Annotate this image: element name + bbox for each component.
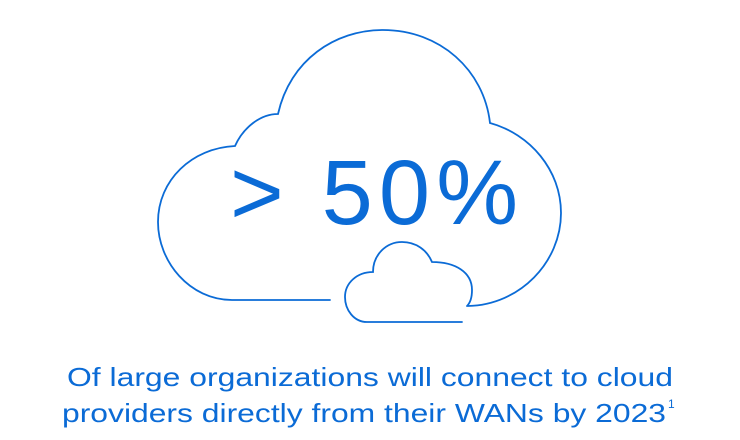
icon: large cloud <box>158 30 561 306</box>
stat: > 50%: > 50% <box>230 142 518 244</box>
text block: caption: providers directly from their WANs by 2023 <box>62 398 666 428</box>
text block: caption: Of large organizations will connect to cloud <box>67 362 673 392</box>
text block: caption <box>62 362 675 428</box>
icon: small cloud <box>345 242 472 322</box>
text block: caption: 1 <box>668 397 675 411</box>
